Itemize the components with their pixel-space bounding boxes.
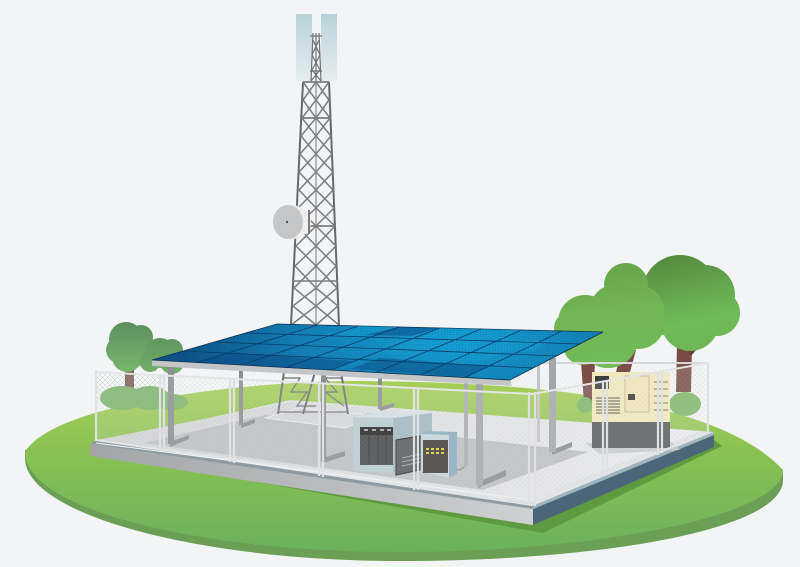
tree: right background trees xyxy=(554,255,740,416)
tower legs xyxy=(291,82,339,325)
lighter solar cells xyxy=(323,326,550,361)
telecom tower xyxy=(278,14,348,418)
tower foundation pad xyxy=(265,408,378,428)
concrete slab xyxy=(90,400,714,525)
tree: left background trees xyxy=(100,322,188,410)
darker solar cells xyxy=(197,327,490,377)
canopy support posts xyxy=(168,358,572,488)
tower base below canopy xyxy=(278,372,348,418)
fence mesh xyxy=(96,363,708,505)
shaded ground beneath solar canopy xyxy=(143,415,588,490)
canopy rail xyxy=(152,360,512,386)
chain-link fence xyxy=(96,362,708,506)
slab shadow on grass xyxy=(90,440,722,533)
solar panel grid xyxy=(183,325,580,378)
tower antennas xyxy=(296,14,337,81)
back fence xyxy=(96,363,708,440)
inverter cabinet xyxy=(353,413,432,475)
solar panel canopy xyxy=(152,324,603,386)
tower mast top xyxy=(310,33,322,81)
solar array xyxy=(152,324,603,380)
post feet xyxy=(170,403,572,488)
fence rails xyxy=(96,363,708,505)
fence posts xyxy=(96,362,708,506)
combiner box xyxy=(421,420,466,478)
tower lattice bracing xyxy=(291,82,339,325)
satellite dish xyxy=(273,205,311,239)
ground disc xyxy=(25,381,783,561)
diesel generator xyxy=(585,372,680,454)
